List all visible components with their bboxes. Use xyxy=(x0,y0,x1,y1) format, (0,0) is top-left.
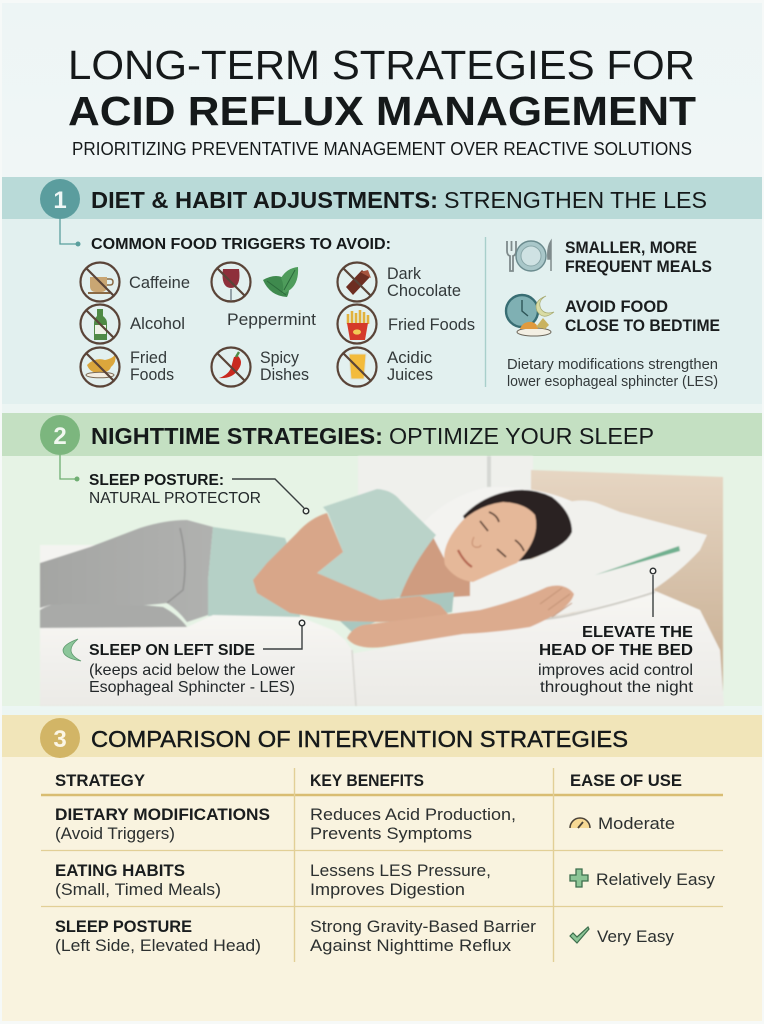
label: acidic juices: Juices xyxy=(387,366,433,384)
icon: caffeine xyxy=(80,262,120,302)
icon: fried chicken xyxy=(80,348,120,386)
photo: woman sleeping on left side xyxy=(40,456,724,706)
table row: eating habits: (Small, Timed Meals) xyxy=(55,880,221,899)
table row: sleep posture: Against Nighttime Reflux xyxy=(310,936,512,955)
section 3 number badge: 3 xyxy=(53,726,67,753)
icon: wine glass xyxy=(212,262,250,302)
note: dietary modifications: Dietary modifications strengthen xyxy=(507,357,718,373)
callout: elevate the head of the bed xyxy=(538,568,694,696)
callout: sleep on left side xyxy=(63,620,305,696)
section 2 heading: OPTIMIZE YOUR SLEEP xyxy=(389,423,654,449)
icon: peppermint leaves xyxy=(263,267,298,297)
panel: section 1 diet and habit adjustments xyxy=(2,177,762,390)
table row: sleep posture: Strong Gravity-Based Barrier xyxy=(310,917,536,936)
habit: avoid food before bed: AVOID FOOD xyxy=(565,298,668,316)
food triggers heading: COMMON FOOD TRIGGERS TO AVOID: xyxy=(91,236,391,253)
callout: sleep on left side: Esophageal Sphincter - LES) xyxy=(89,679,295,696)
icon: acidic juice xyxy=(338,348,376,386)
label: dark chocolate: Dark xyxy=(387,265,422,283)
table row: eating habits: Relatively Easy xyxy=(596,870,716,889)
section 1 heading: STRENGTHEN THE LES xyxy=(444,187,707,213)
table row: dietary modifications: Prevents Symptoms xyxy=(310,824,472,843)
section 2 number badge xyxy=(40,415,80,482)
label: acidic juices: Acidic xyxy=(387,349,432,367)
table row: dietary modifications: (Avoid Triggers) xyxy=(55,824,175,843)
callout: elevate the head of the bed: ELEVATE THE xyxy=(582,624,693,641)
table row: dietary modifications: DIETARY MODIFICATIONS xyxy=(55,806,270,824)
table row: dietary modifications xyxy=(55,805,675,843)
callout: sleep on left side: (keeps acid below the Lower xyxy=(89,662,296,679)
table row: eating habits: Improves Digestion xyxy=(310,880,465,899)
habit: smaller meals: SMALLER, MORE xyxy=(565,239,697,257)
table row: dietary modifications: Moderate xyxy=(598,814,675,833)
icon: alcohol bottle xyxy=(80,304,120,344)
section 3 heading: COMPARISON OF INTERVENTION STRATEGIES xyxy=(91,726,628,752)
table row: sleep posture: (Left Side, Elevated Head) xyxy=(55,936,261,955)
section 1 number badge xyxy=(40,179,80,246)
table row: sleep posture: Very Easy xyxy=(597,927,674,946)
icon: chili pepper xyxy=(212,348,250,386)
callout: sleep posture xyxy=(89,472,309,514)
table grid xyxy=(41,768,723,962)
label: fried foods right: Fried Foods xyxy=(388,316,475,334)
section 1 heading: DIET & HABIT ADJUSTMENTS: xyxy=(91,187,438,213)
table row: eating habits: Lessens LES Pressure, xyxy=(310,861,491,880)
section 3 number badge xyxy=(40,718,80,758)
callout: elevate the head of the bed: throughout the night xyxy=(540,679,694,696)
table row: sleep posture: SLEEP POSTURE xyxy=(55,918,192,936)
habit: smaller meals: FREQUENT MEALS xyxy=(565,258,712,276)
table row: eating habits xyxy=(55,861,716,899)
table header: STRATEGY xyxy=(55,772,145,790)
table row: sleep posture xyxy=(55,917,674,955)
callout: sleep posture: NATURAL PROTECTOR xyxy=(89,490,261,507)
section 2 number badge: 2 xyxy=(53,423,67,450)
icon: clock, moon and meal xyxy=(506,295,554,336)
habit: avoid food before bed: CLOSE TO BEDTIME xyxy=(565,317,720,335)
table header: KEY BENEFITS xyxy=(310,772,424,790)
subtitle: PRIORITIZING PREVENTATIVE MANAGEMENT OVER REACTIVE SOLUTIONS xyxy=(72,139,692,159)
section 2 heading: NIGHTTIME STRATEGIES: xyxy=(91,423,383,449)
callout: elevate the head of the bed: HEAD OF THE BED xyxy=(539,642,693,659)
label: fried foods left: Fried xyxy=(130,349,167,367)
title: LONG-TERM STRATEGIES FOR xyxy=(68,42,695,88)
label: spicy dishes: Dishes xyxy=(260,366,309,384)
label: peppermint: Peppermint xyxy=(227,311,316,329)
section 1 number badge: 1 xyxy=(53,187,67,214)
label: dark chocolate: Chocolate xyxy=(387,282,461,300)
panel: section 3 comparison table xyxy=(2,715,762,962)
section 2 header band xyxy=(2,413,762,456)
table row: dietary modifications: Reduces Acid Production, xyxy=(310,805,516,824)
table row: eating habits: EATING HABITS xyxy=(55,862,185,880)
icon: dark chocolate xyxy=(338,262,376,302)
label: fried foods left: Foods xyxy=(130,366,174,384)
callout: sleep posture: SLEEP POSTURE: xyxy=(89,472,224,489)
table header xyxy=(55,772,682,790)
icon: fork plate knife xyxy=(507,241,551,271)
title: ACID REFLUX MANAGEMENT xyxy=(68,88,696,134)
note: dietary modifications: lower esophageal sphincter (LES) xyxy=(507,374,718,390)
icon: french fries xyxy=(338,304,376,344)
callout: elevate the head of the bed: improves acid control xyxy=(538,662,693,679)
panel: section 2 nighttime strategies xyxy=(2,413,762,706)
label: spicy dishes: Spicy xyxy=(260,349,300,367)
section 3 header band xyxy=(2,715,762,757)
title xyxy=(68,42,696,134)
label: alcohol: Alcohol xyxy=(130,315,185,333)
section 1 header band xyxy=(2,177,762,219)
table header: EASE OF USE xyxy=(570,772,682,790)
callout: sleep on left side: SLEEP ON LEFT SIDE xyxy=(89,642,255,659)
label: caffeine: Caffeine xyxy=(129,274,190,292)
